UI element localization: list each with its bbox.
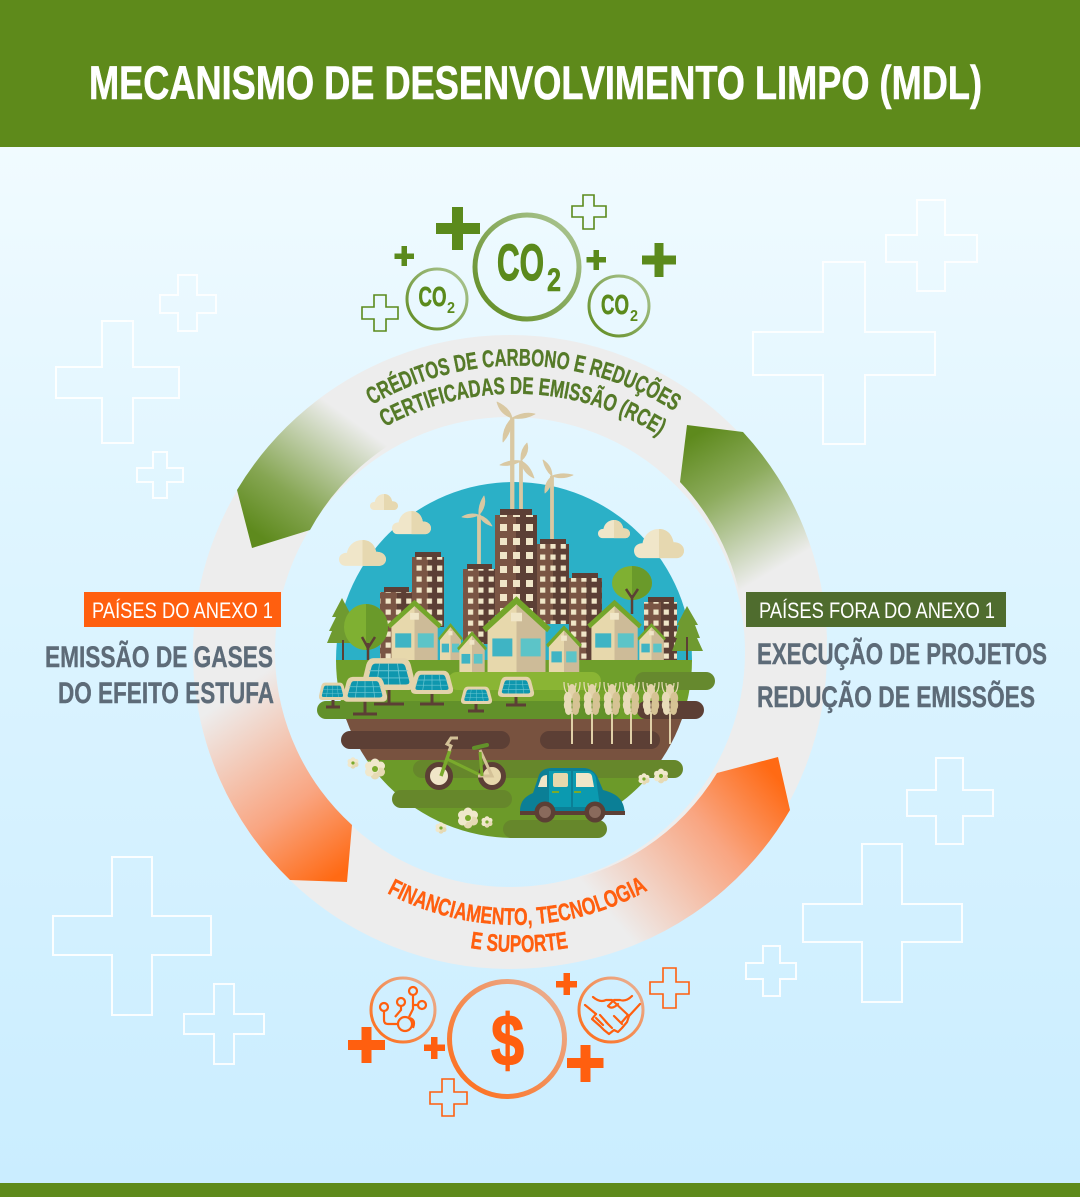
car xyxy=(520,768,625,822)
arc label: financing: E SUPORTE xyxy=(471,932,568,952)
city globe illustration xyxy=(317,402,715,840)
CO2 small circle left: CO xyxy=(418,281,446,312)
right label: non-Annex 1 countries: PAÍSES FORA DO ANEXO 1 xyxy=(759,598,995,623)
wind turbines xyxy=(462,402,573,567)
arrow: green upper left xyxy=(237,355,428,548)
CO2 small circle right: CO xyxy=(601,289,629,320)
handshake circle xyxy=(579,978,643,1042)
CO2 large circle: 2 xyxy=(547,262,561,298)
left description: EMISSÃO DE GASES xyxy=(45,640,273,674)
CO2 large circle: CO xyxy=(497,234,544,291)
right description xyxy=(757,637,1047,714)
technology circle xyxy=(371,978,435,1042)
ground xyxy=(330,660,700,840)
wheat xyxy=(564,682,678,744)
dollar circle xyxy=(450,982,564,1096)
bicycle xyxy=(428,738,504,788)
arrow: orange lower left xyxy=(193,660,352,882)
CO2 small circle left xyxy=(407,269,467,329)
CO2 small circle right: 2 xyxy=(630,308,638,325)
terrain stripes xyxy=(317,672,715,838)
arc label: financing xyxy=(388,878,648,952)
arc label: carbon credits: CRÉDITOS DE CARBONO E REDUÇÕES xyxy=(366,348,681,410)
right label: non-Annex 1 countries xyxy=(746,592,1047,714)
CO2 small circle left: 2 xyxy=(447,300,455,317)
dollar circle: $ xyxy=(491,1001,524,1081)
sky xyxy=(336,482,692,662)
cycle ring xyxy=(193,355,827,965)
left label: Annex 1 countries xyxy=(45,592,281,710)
flowers xyxy=(348,757,668,834)
CO2 icon cluster xyxy=(362,195,676,336)
header bar xyxy=(0,0,1080,147)
arrow: green upper right xyxy=(680,425,827,640)
arc label: financing: FINANCIAMENTO, TECNOLOGIA xyxy=(388,878,648,928)
left description xyxy=(45,640,274,710)
CO2 large circle xyxy=(475,215,579,319)
financing icon cluster xyxy=(348,968,689,1116)
houses xyxy=(389,600,665,672)
trees xyxy=(327,566,703,660)
background outlined plus signs xyxy=(53,200,993,1064)
left label: Annex 1 countries: PAÍSES DO ANEXO 1 xyxy=(92,598,273,623)
footer bar xyxy=(0,1183,1080,1197)
CO2 small circle right xyxy=(589,276,649,336)
clouds xyxy=(339,494,684,566)
green plus signs xyxy=(362,195,676,331)
arrow: orange lower right xyxy=(548,757,790,965)
arc label: carbon credits: CERTIFICADAS DE EMISSÃO (RCE) xyxy=(380,377,666,438)
skyscrapers xyxy=(380,509,677,660)
solar panels xyxy=(319,658,534,714)
orange plus signs xyxy=(348,968,689,1116)
left description: DO EFEITO ESTUFA xyxy=(58,677,274,710)
